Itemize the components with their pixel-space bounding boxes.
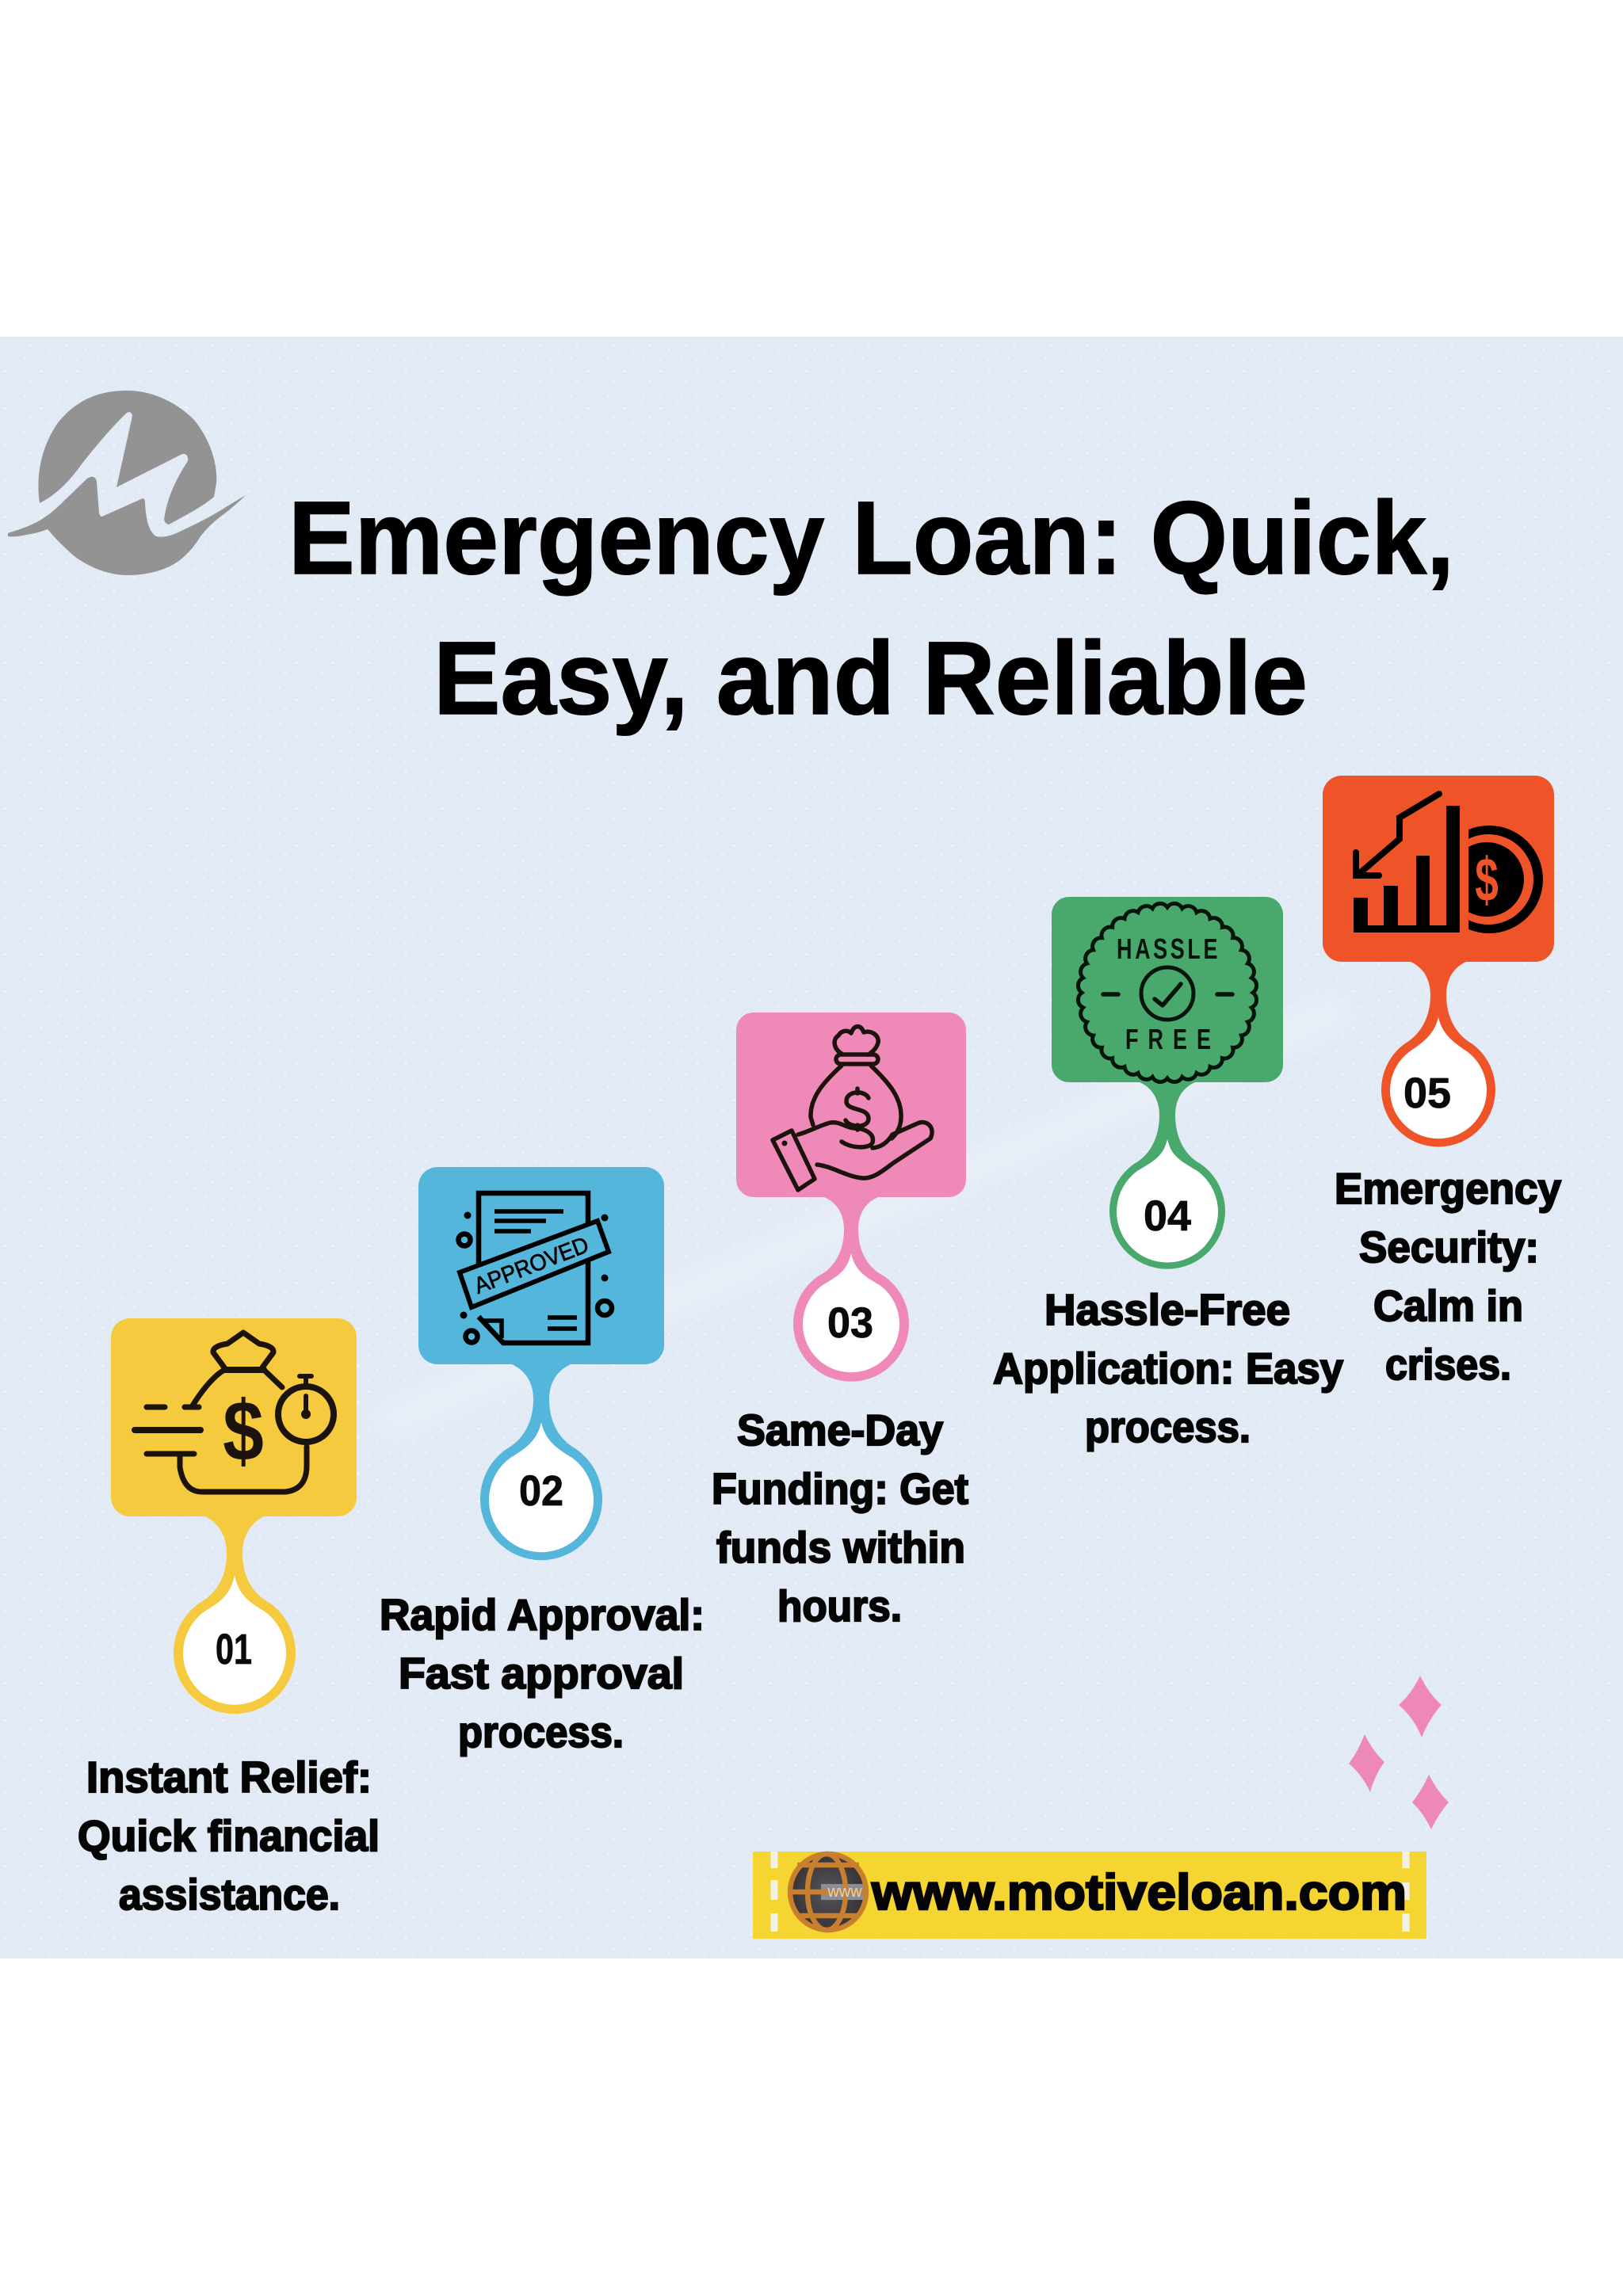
label 04 — [993, 1285, 1343, 1451]
icon: globe: www — [827, 1883, 862, 1901]
label 01: assistance. — [119, 1870, 340, 1919]
step 02: rapid approval — [380, 1167, 705, 1756]
label 02: process. — [458, 1707, 624, 1756]
title: Easy, and Reliable — [433, 620, 1308, 736]
decorative sparkles — [1349, 1676, 1449, 1829]
icon: falling chart with coin — [1354, 794, 1543, 933]
number badge 01 — [183, 1575, 286, 1705]
step 03: same-day funding — [712, 1013, 968, 1630]
label 03: funds within — [716, 1523, 965, 1572]
icon: approved document — [458, 1193, 612, 1343]
icon: hassle free badge: HASSLE — [1117, 933, 1217, 965]
icon: money bag with stopwatch: $ — [223, 1383, 264, 1479]
label 01: Instant Relief: — [86, 1753, 372, 1802]
number badge 02: 02 — [519, 1467, 563, 1515]
connector drop 04 — [1109, 1082, 1225, 1269]
label 04: Application: Easy — [993, 1344, 1343, 1393]
label 05: crises. — [1385, 1340, 1511, 1389]
number badge 01: 01 — [216, 1626, 252, 1673]
icon: money bag with stopwatch — [135, 1333, 334, 1492]
label 03 — [712, 1405, 968, 1630]
label 04: process. — [1085, 1402, 1251, 1451]
connector drop 03 — [793, 1197, 909, 1382]
step 05: emergency security — [1323, 776, 1561, 1389]
website url: www.motiveloan.com — [871, 1865, 1407, 1920]
panel: background — [0, 337, 1623, 1958]
label 02: Rapid Approval: — [380, 1590, 705, 1639]
label 03: Funding: Get — [712, 1464, 968, 1513]
label 05: Calm in — [1373, 1281, 1523, 1330]
step 01: instant relief — [78, 1318, 380, 1919]
label 04: Hassle-Free — [1044, 1285, 1290, 1334]
number badge 04 — [1117, 1139, 1218, 1262]
number badge 05 — [1390, 1017, 1487, 1138]
number badge 02 — [489, 1422, 594, 1552]
icon: globe — [789, 1852, 868, 1932]
website banner — [753, 1852, 1426, 1939]
card 04 — [1052, 897, 1283, 1082]
label 01: Quick financial — [78, 1811, 380, 1860]
number badge 03: 03 — [827, 1299, 873, 1347]
label 03: hours. — [777, 1581, 902, 1630]
icon: hand holding money bag — [773, 1027, 932, 1190]
connector drop 01 — [174, 1516, 296, 1714]
card 03 — [736, 1013, 966, 1197]
number badge 03 — [803, 1253, 899, 1372]
card 01 — [111, 1318, 357, 1516]
icon: falling chart with coin: $ — [1475, 846, 1499, 915]
icon: hassle free badge: FREE — [1125, 1023, 1211, 1055]
connector drop 02 — [480, 1364, 602, 1560]
label 03: Same-Day — [737, 1405, 943, 1455]
card 05 — [1323, 776, 1554, 962]
label 02: Fast approval — [399, 1649, 684, 1698]
logo — [8, 391, 246, 575]
label 02 — [380, 1590, 705, 1756]
label 05: Emergency — [1335, 1164, 1561, 1213]
icon: hassle free badge — [1078, 903, 1257, 1082]
icon: approved document: APPROVED — [471, 1232, 592, 1299]
label 05: Security: — [1359, 1222, 1539, 1272]
number badge 04: 04 — [1144, 1192, 1191, 1240]
card 02 — [418, 1167, 664, 1364]
connector drop 05 — [1381, 962, 1495, 1146]
label 01 — [78, 1753, 380, 1919]
title: Emergency Loan: Quick, — [288, 479, 1454, 596]
title — [288, 479, 1454, 736]
number badge 05: 05 — [1403, 1070, 1451, 1117]
step 04: hassle-free application — [993, 897, 1343, 1451]
label 05 — [1335, 1164, 1561, 1389]
